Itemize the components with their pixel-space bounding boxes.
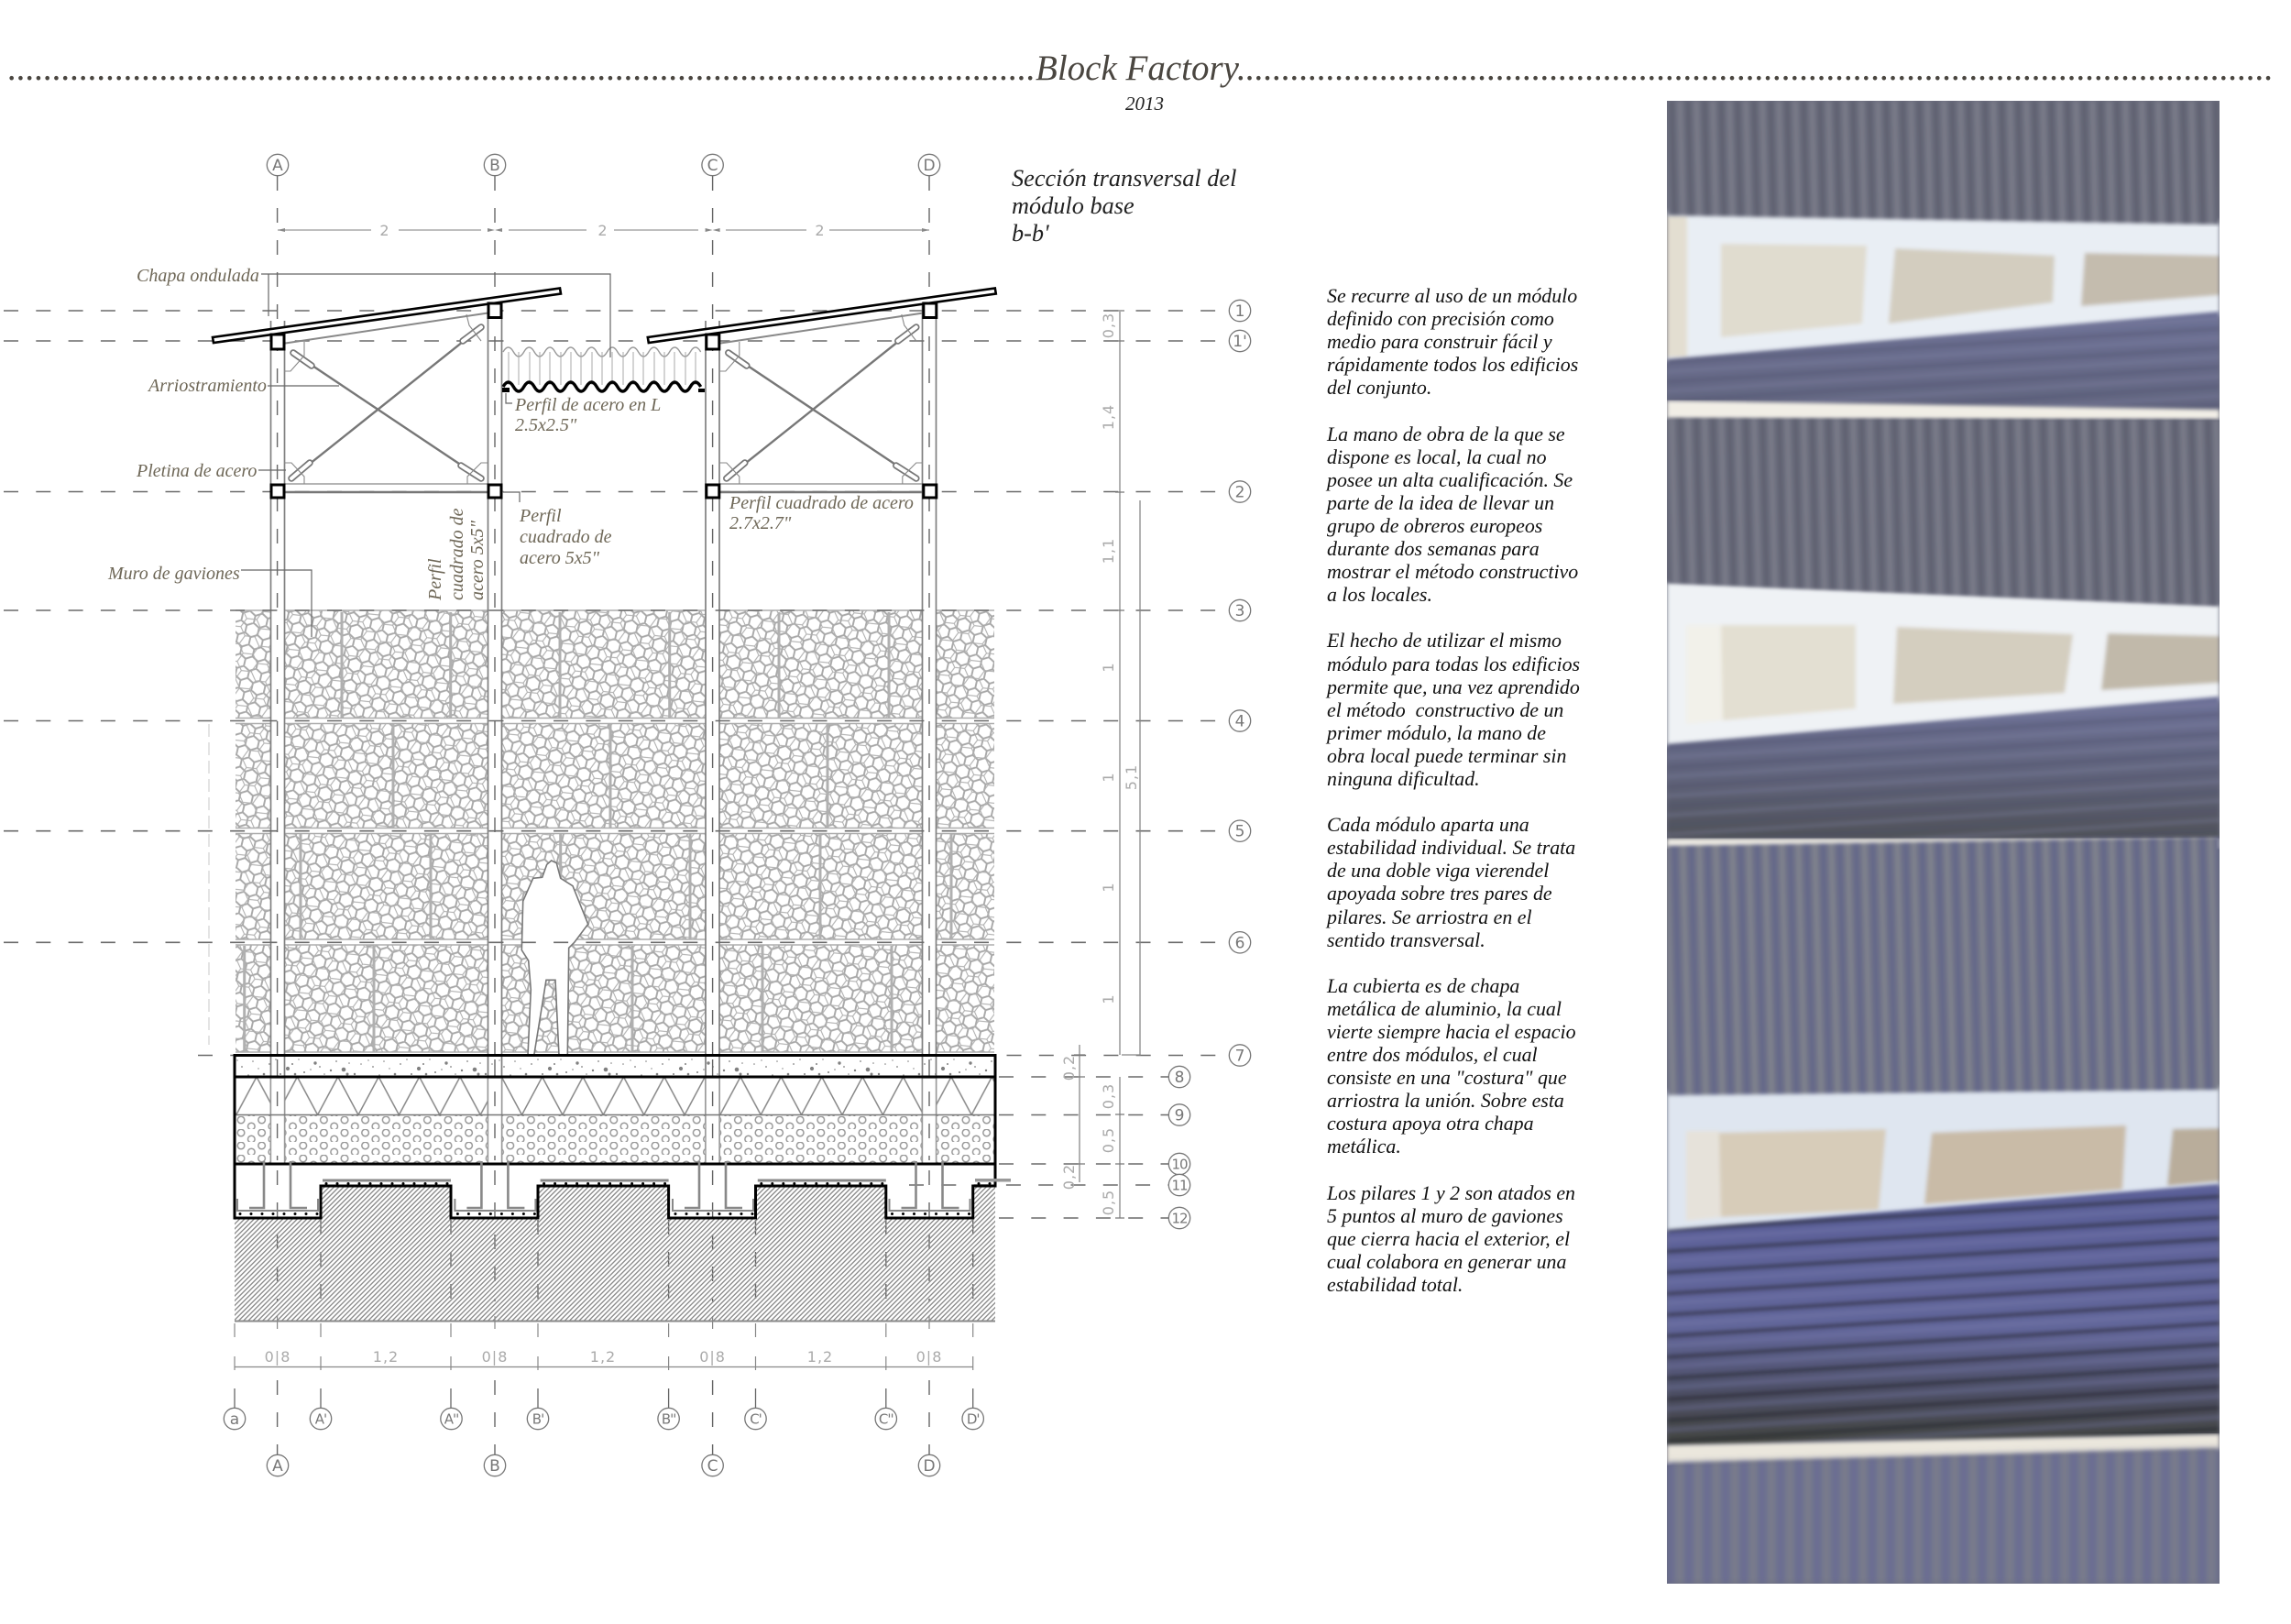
right vertical dimensions: 1 [1100, 993, 1117, 1004]
text block: project description: Se recurre al uso de un módulo definido con precisión como medio para construir fácil y rápidamente todos los edificios del conjunto. La mano de obra de la que se dispone es local, la cual no posee un alta cualificación. Se parte de la idea de llevar un grupo de obreros europeos durante dos semanas para mostrar el método constructivo a los locales. El hecho de utilizar el mismo módulo para todas los edificios permite que, una vez aprendido el método constructivo de un primer módulo, la mano de obra local puede terminar sin ninguna dificultad. Cada módulo aparta una estabilidad individual. Se trata de una doble viga vierendel apoyada sobre tres pares de pilares. Se arriostra en el sentido transversal. La cubierta es de chapa metálica de aluminio, la cual vierte siempre hacia el espacio entre dos módulos, el cual consiste en una "costura" que arriostra la unión. Sobre esta costura apoya otra chapa metálica. Los pilares 1 y 2 son atados en 5 puntos al muro de gaviones que cierra hacia el exterior, el cual colabora en generar una estabilidad total. [1327, 284, 1580, 1296]
grid labels: 1 [1235, 302, 1244, 321]
top dimension line: 2 [597, 222, 608, 239]
right vertical dimensions: 0,2 [1060, 1055, 1078, 1081]
grid labels: C [707, 1457, 718, 1476]
concrete slab [235, 1056, 995, 1077]
grid labels: 9 [1175, 1107, 1184, 1125]
gabion wall [236, 610, 994, 1056]
column gaps [271, 1078, 937, 1164]
annotation labels: acero 5x5" [520, 548, 600, 568]
grid labels: C' [750, 1411, 762, 1428]
grid labels [230, 157, 1247, 1476]
right vertical dimensions: 0,5 [1100, 1127, 1117, 1153]
right vertical dimensions: 0,2 [1060, 1164, 1078, 1190]
annotation labels: acero 5x5" [467, 520, 488, 600]
grid labels: 3 [1235, 602, 1244, 620]
grid labels: C'' [879, 1411, 893, 1428]
foundation layers [235, 1054, 1011, 1322]
bottom dimension line: 1,2 [590, 1348, 616, 1366]
white strip 1 [1667, 401, 2220, 420]
heading: section title: b-b' [1012, 220, 1049, 247]
right vertical dimensions: 5,1 [1123, 764, 1140, 790]
insulation zigzag [235, 1077, 995, 1114]
natural ground hatch [235, 1186, 995, 1322]
grid labels: B [489, 1457, 500, 1476]
top dimension line: 2 [815, 222, 826, 239]
blue sheet 4 [1667, 697, 2220, 839]
year: 2013 [1125, 93, 1164, 115]
grid labels: 11 [1171, 1177, 1188, 1193]
photo: corrugated roof model [1667, 101, 2220, 1584]
bottom dimension line: 0|8 [916, 1348, 942, 1366]
grid labels: 8 [1175, 1069, 1184, 1087]
grid labels: A'' [444, 1411, 458, 1428]
annotation labels: Arriostramiento [147, 376, 267, 396]
bottom dimension line [235, 1316, 973, 1409]
right vertical dimensions: 0,3 [1100, 313, 1117, 338]
annotation labels: Perfil [519, 506, 562, 526]
gravel layer [235, 1114, 995, 1164]
ribbed sheet 1 [1667, 101, 2220, 225]
faint left guide line [208, 724, 210, 1045]
level lines [4, 311, 1230, 1218]
grid labels: D' [967, 1411, 980, 1428]
right vertical dimensions: 1,1 [1100, 538, 1117, 564]
layer outlines [235, 1054, 995, 1322]
bottom dimension line: 0|8 [699, 1348, 726, 1366]
grid labels: D [923, 1457, 936, 1476]
grid labels: A [272, 1457, 283, 1476]
grid labels: 1' [1233, 333, 1247, 351]
annotation labels: Perfil cuadrado de acero [729, 493, 914, 513]
grid labels: 2 [1235, 484, 1244, 502]
columns A B C D [271, 302, 937, 1164]
truss row 3 [1667, 1086, 2220, 1233]
grid labels: A' [315, 1411, 326, 1428]
column centre dashes [278, 1059, 929, 1160]
truss module left [213, 288, 561, 498]
annotation labels: cuadrado de [447, 508, 467, 600]
right vertical dimensions [1060, 311, 1140, 1218]
grid bubbles [224, 154, 1251, 1476]
grid labels: D [923, 157, 936, 175]
annotation labels [107, 266, 914, 601]
top dimension line [278, 222, 929, 239]
truss row 1 [1667, 211, 2220, 362]
title: ...................................................................................................................Block Factory.................................................................................................................... [8, 49, 2274, 88]
grid labels: B' [532, 1411, 543, 1428]
heading: section title: Sección transversal del [1012, 165, 1236, 192]
white strip 3 [1667, 1434, 2220, 1465]
right vertical dimensions: 1 [1100, 772, 1117, 783]
right vertical dimensions: 1 [1100, 882, 1117, 893]
grid labels: a [230, 1410, 239, 1429]
grid labels: C [707, 157, 718, 175]
annotation labels: Chapa ondulada [137, 266, 259, 286]
footing reinforcement [237, 1161, 1011, 1213]
bottom dimension line: 0|8 [482, 1348, 508, 1366]
annotation labels: 2.7x2.7" [729, 513, 792, 533]
leader lines [241, 274, 610, 637]
grid labels: 7 [1235, 1047, 1244, 1065]
heading: section title: módulo base [1012, 192, 1135, 219]
right vertical dimensions: 1,4 [1100, 404, 1117, 430]
blue sheet 6 [1667, 1184, 2220, 1445]
ribbed sheet 5 [1667, 837, 2220, 1095]
ribbed sheet 7 [1667, 1448, 2220, 1584]
grid labels: 10 [1171, 1157, 1188, 1173]
right vertical dimensions: 1 [1100, 662, 1117, 673]
truss row 2 [1667, 582, 2220, 747]
corrugated sheet gutter [502, 346, 705, 392]
human silhouette [521, 861, 588, 1056]
grid labels: 4 [1235, 713, 1244, 731]
bottom dimension line: 1,2 [807, 1348, 833, 1366]
annotation labels: Perfil [425, 558, 445, 601]
right vertical dimensions: 0,5 [1100, 1190, 1117, 1215]
grid labels: B [489, 157, 500, 175]
white strip 2 [1667, 839, 2220, 849]
grid labels: 12 [1171, 1210, 1188, 1226]
annotation labels: 2.5x2.5" [515, 415, 577, 435]
ribbed sheet 3 [1667, 418, 2220, 606]
grid labels: 6 [1235, 934, 1244, 952]
grid labels: A [272, 157, 283, 175]
annotation labels: cuadrado de [520, 527, 612, 547]
top dimension line: 2 [379, 222, 390, 239]
blue sheet 2 [1667, 312, 2220, 410]
bottom dimension line: 0|8 [265, 1348, 290, 1366]
panel: cross-section drawing [4, 154, 1251, 1476]
right vertical dimensions: 0,3 [1100, 1083, 1117, 1109]
grid labels: B'' [662, 1411, 675, 1428]
annotation labels: Pletina de acero [136, 461, 257, 481]
bottom dimension line: 1,2 [373, 1348, 399, 1366]
grid axes [278, 176, 973, 1455]
grid labels: 5 [1235, 823, 1244, 841]
truss module right [648, 288, 996, 498]
annotation labels: Perfil de acero en L [514, 395, 661, 415]
annotation labels: Muro de gaviones [107, 564, 240, 584]
